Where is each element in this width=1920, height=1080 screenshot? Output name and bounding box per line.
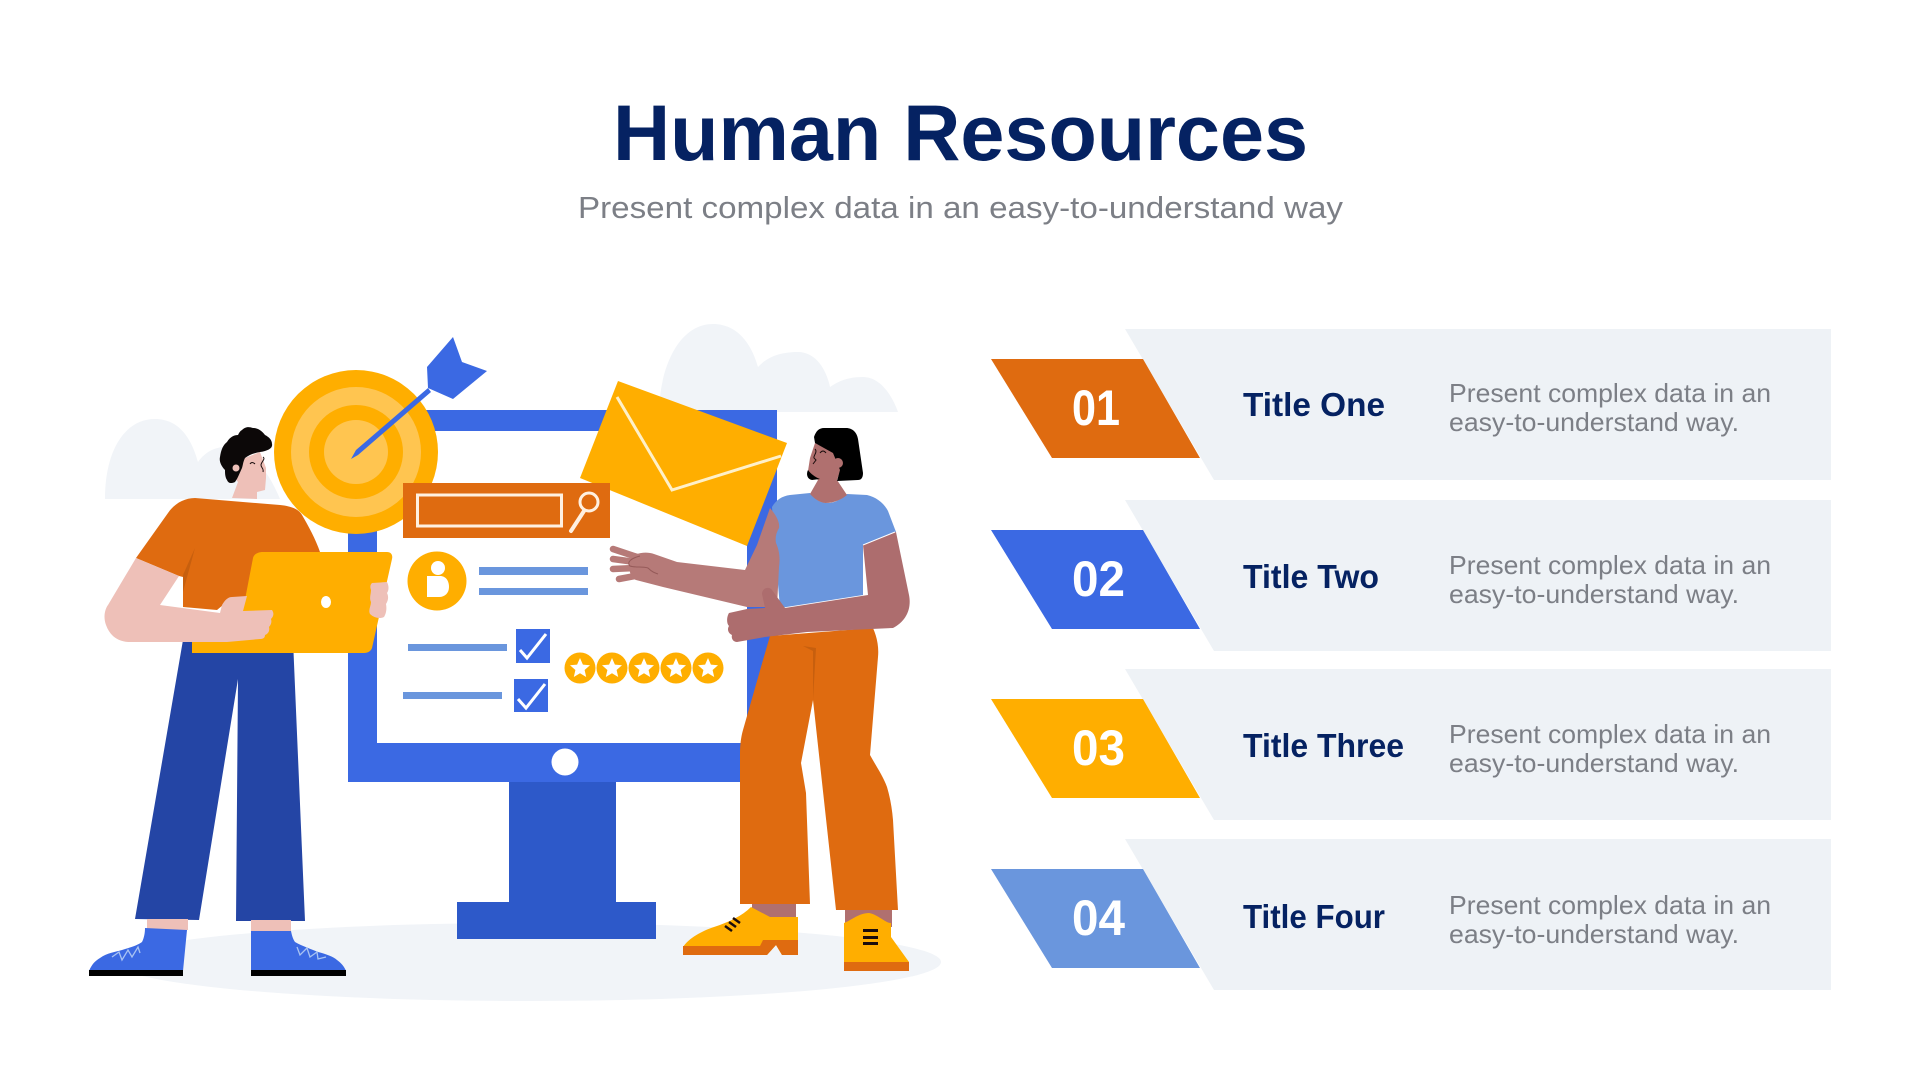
row 3 bbox=[991, 669, 1831, 820]
row 2 bbox=[991, 500, 1831, 651]
woman chin hair bbox=[807, 470, 820, 480]
tablet bbox=[192, 552, 392, 653]
woman ankles bbox=[752, 900, 892, 927]
panel 2 background bbox=[1125, 500, 1831, 651]
profile text lines bbox=[479, 567, 588, 595]
description 3 bbox=[1449, 719, 1771, 778]
woman neck and head bbox=[808, 443, 847, 503]
arm bbox=[629, 508, 780, 607]
monitor bbox=[348, 410, 777, 939]
description 1: Present complex data in an bbox=[1449, 378, 1771, 408]
man socks bbox=[147, 919, 291, 931]
monitor frame bbox=[348, 410, 777, 782]
woman shirt bbox=[772, 493, 896, 608]
badge 02 bbox=[991, 530, 1200, 629]
search bar bbox=[403, 483, 610, 538]
badge 03 bbox=[991, 699, 1200, 798]
badge 01 bbox=[991, 359, 1200, 458]
fingers bbox=[613, 549, 640, 579]
panel 1 background bbox=[1125, 329, 1831, 480]
woman front arm bbox=[727, 532, 910, 642]
description 1: easy-to-understand way. bbox=[1449, 407, 1739, 437]
ground ellipse bbox=[115, 923, 941, 1001]
title three: Title Three bbox=[1243, 727, 1404, 764]
shirt fold bbox=[183, 548, 195, 592]
man trousers bbox=[135, 640, 305, 921]
number 02: 02 bbox=[1072, 551, 1125, 607]
description 3: easy-to-understand way. bbox=[1449, 748, 1739, 778]
panel 3 background bbox=[1125, 669, 1831, 820]
magnifier icon bbox=[571, 493, 598, 531]
description 2 bbox=[1449, 550, 1771, 609]
woman back arm bbox=[613, 508, 780, 607]
arrow bbox=[351, 337, 487, 459]
camera dot bbox=[552, 748, 578, 776]
five star rating bbox=[564, 652, 724, 684]
profile icon bbox=[408, 552, 466, 610]
trouser fold bbox=[803, 646, 816, 700]
description 4 bbox=[1449, 890, 1771, 949]
checklist bbox=[403, 629, 550, 712]
target with arrow bbox=[274, 337, 487, 534]
man left shoe bbox=[89, 928, 187, 976]
man face details bbox=[250, 457, 264, 472]
cloud left bbox=[105, 419, 280, 499]
title four: Title Four bbox=[1243, 898, 1385, 935]
man figure bbox=[89, 427, 392, 976]
panel 4 background bbox=[1125, 839, 1831, 990]
cloud right bbox=[659, 324, 898, 412]
monitor stand bbox=[509, 780, 616, 904]
description 3: Present complex data in an bbox=[1449, 719, 1771, 749]
woman ear bbox=[833, 458, 843, 468]
title one: Title One bbox=[1243, 386, 1385, 423]
woman hair bbox=[814, 428, 863, 481]
badge 04 bbox=[991, 869, 1200, 968]
sleeve edge bbox=[863, 532, 895, 545]
row 4 bbox=[991, 839, 1831, 990]
title two: Title Two bbox=[1243, 558, 1379, 595]
man hair bbox=[220, 427, 272, 483]
number 01: 01 bbox=[1072, 380, 1120, 436]
man arm and hand bbox=[105, 558, 273, 642]
woman face details bbox=[813, 449, 826, 464]
row 1 bbox=[991, 329, 1831, 480]
woman figure bbox=[613, 428, 910, 971]
man ear bbox=[232, 464, 240, 472]
illustration: HR scene bbox=[89, 324, 941, 1001]
woman right shoe bbox=[844, 913, 909, 971]
title: Human Resources bbox=[613, 88, 1308, 177]
man right shoe bbox=[251, 931, 346, 976]
man right hand on tablet bbox=[369, 582, 388, 618]
woman left shoe bbox=[683, 907, 798, 955]
description 4: Present complex data in an bbox=[1449, 890, 1771, 920]
hand crease bbox=[629, 556, 658, 574]
woman trousers bbox=[740, 628, 898, 910]
monitor base bbox=[457, 902, 656, 939]
description 1 bbox=[1449, 378, 1771, 437]
man neck and face bbox=[232, 452, 266, 499]
description 2: easy-to-understand way. bbox=[1449, 579, 1739, 609]
target rings bbox=[274, 370, 438, 534]
monitor screen bbox=[377, 431, 747, 743]
description 2: Present complex data in an bbox=[1449, 550, 1771, 580]
envelope bbox=[580, 381, 787, 546]
man shirt bbox=[136, 498, 325, 620]
number 03: 03 bbox=[1072, 720, 1125, 776]
number 04: 04 bbox=[1072, 890, 1125, 946]
description 4: easy-to-understand way. bbox=[1449, 919, 1739, 949]
subtitle: Present complex data in an easy-to-understand way bbox=[578, 190, 1344, 225]
